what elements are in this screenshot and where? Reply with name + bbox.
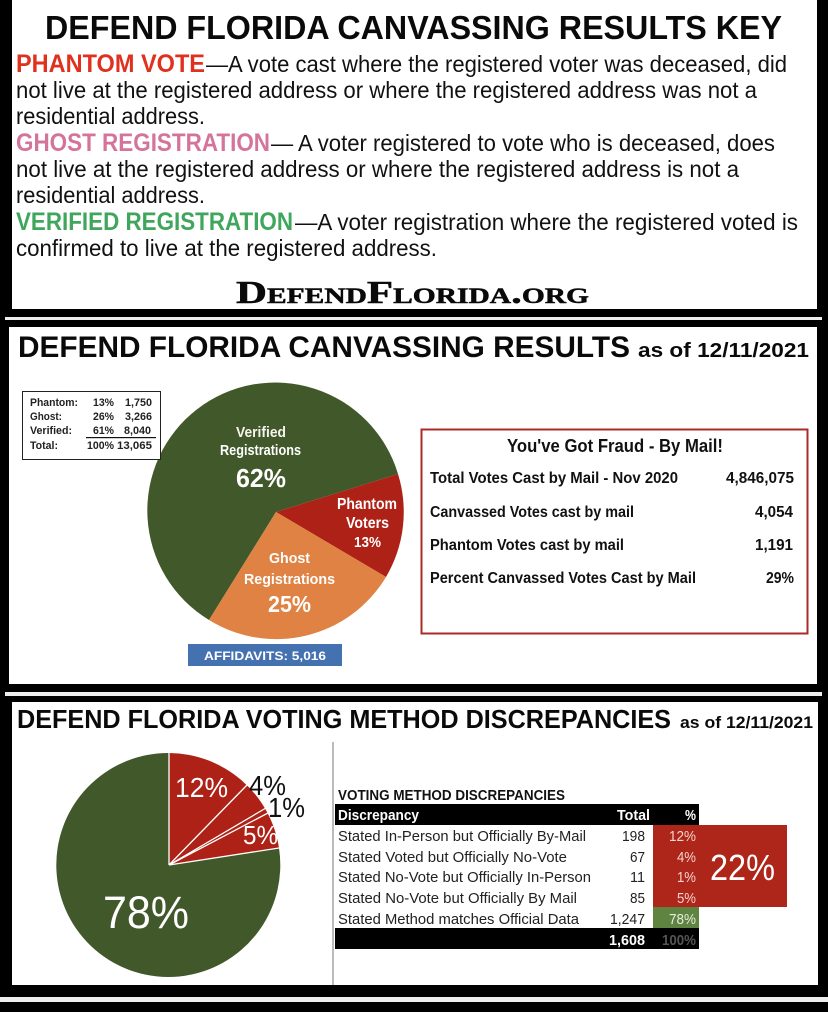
label: phantom voters: Phantom (337, 496, 397, 513)
text block: verified registration definition (16, 208, 798, 261)
text block: phantom vote definition: residential address. (16, 103, 205, 129)
callout: fraud by mail: 4,846,075 (726, 470, 794, 487)
heading: canvassing results: as of 12/11/2021 (638, 340, 809, 362)
table: voting method discrepancies: 100% (662, 932, 696, 949)
summary table: 61% (93, 425, 114, 437)
callout: fraud by mail: Phantom Votes cast by mail (430, 537, 624, 554)
summary table: Verified: (30, 425, 72, 437)
text block: phantom vote definition: not live at the registered address or where the registered address was not a (16, 77, 757, 103)
label: ghost registrations: Registrations (244, 571, 335, 588)
label: 78 percent: 78% (103, 887, 189, 938)
text block: ghost registration definition: not live at the registered address or where the registered address is not a (16, 156, 739, 182)
label: 1 percent: 1% (268, 792, 305, 823)
callout: fraud by mail: 4,054 (755, 504, 793, 521)
table: voting method discrepancies (335, 788, 787, 949)
label: verified registrations: 62% (236, 463, 286, 493)
summary table: 1,750 (125, 397, 152, 409)
text block: phantom vote definition: PHANTOM VOTE (16, 50, 205, 78)
summary table: 26% (93, 411, 114, 423)
callout: fraud by mail: 1,191 (755, 537, 793, 554)
table: voting method discrepancies: 1,608 (609, 932, 645, 949)
panel: results key (12, 0, 817, 310)
table: voting method discrepancies: Discrepancy (338, 807, 420, 824)
table: voting method discrepancies: Total (617, 807, 650, 824)
label: 4 percent: 4% (249, 770, 286, 801)
label: verified registrations (220, 425, 301, 493)
heading: voting method discrepancies: as of 12/11/2021 (680, 714, 813, 732)
summary table: Ghost: (30, 411, 62, 423)
summary table: 3,266 (125, 411, 152, 423)
text block: verified registration definition: —A voter registration where the registered voted is (295, 209, 798, 235)
summary table: Total: (30, 440, 58, 452)
pie chart: registration results (147, 383, 404, 639)
label: ghost registrations (244, 550, 335, 617)
table: voting method discrepancies: 4% (677, 850, 696, 866)
table: voting method discrepancies: 5% (677, 891, 696, 907)
label: ghost registrations: 25% (268, 591, 311, 617)
summary table (22, 392, 160, 460)
table: voting method discrepancies: 85 (630, 891, 645, 907)
callout: fraud by mail: 29% (766, 570, 794, 587)
label: phantom voters: 13% (354, 534, 381, 551)
table: voting method discrepancies: 12% (669, 829, 696, 845)
table: voting method discrepancies: VOTING METHOD DISCREPANCIES (338, 788, 565, 804)
text block: ghost registration definition: residential address. (16, 182, 205, 208)
table: voting method discrepancies: Stated No-Vote but Officially In-Person (338, 870, 591, 886)
label: 12 percent: 12% (175, 772, 228, 803)
text block: verified registration definition: confirmed to live at the registered address. (16, 235, 437, 261)
table: voting method discrepancies: 78% (669, 912, 696, 928)
summary table: Phantom: (30, 397, 78, 409)
pie chart: discrepancy share (56, 753, 305, 977)
table: voting method discrepancies: Stated Voted but Officially No-Vote (338, 850, 567, 866)
table: voting method discrepancies: 67 (630, 850, 645, 866)
text block: ghost registration definition (16, 129, 775, 208)
table: voting method discrepancies: % (685, 807, 696, 824)
text block: ghost registration definition: — A voter registered to vote who is deceased, does (271, 130, 775, 156)
callout: fraud by mail: Canvassed Votes cast by mail (430, 504, 634, 521)
summary table: 100% (87, 440, 114, 452)
badge: affidavits (188, 644, 342, 666)
panel: canvassing results (9, 327, 817, 684)
heading: voting method discrepancies: DEFEND FLORIDA VOTING METHOD DISCREPANCIES (17, 704, 671, 734)
table: voting method discrepancies: 1% (677, 870, 696, 886)
label: phantom voters: Voters (346, 515, 389, 532)
callout: fraud by mail: Total Votes Cast by Mail - Nov 2020 (430, 470, 678, 487)
text block: ghost registration definition: GHOST REGISTRATION (16, 129, 270, 157)
label: verified registrations: Registrations (220, 443, 301, 459)
title: canvassing results key: DEFEND FLORIDA CANVASSING RESULTS KEY (45, 9, 782, 46)
panel: voting method discrepancies (12, 702, 818, 985)
table: voting method discrepancies: 11 (630, 870, 645, 886)
text block: phantom vote definition (16, 50, 787, 129)
label: phantom voters (337, 496, 397, 551)
heading: canvassing results: DEFEND FLORIDA CANVASSING RESULTS (18, 331, 630, 364)
callout: fraud by mail: You've Got Fraud - By Mail! (507, 436, 723, 456)
callout: fraud by mail (422, 430, 808, 634)
label: 5 percent: 5% (243, 820, 278, 850)
table: voting method discrepancies: Stated No-Vote but Officially By Mail (338, 891, 577, 907)
table: voting method discrepancies: 198 (622, 829, 645, 845)
text block: verified registration definition: VERIFIED REGISTRATION (16, 208, 293, 236)
label: verified registrations: Verified (236, 425, 286, 441)
callout: 22 percent total: 22% (710, 847, 775, 888)
text block: phantom vote definition: —A vote cast where the registered voter was deceased, did (206, 51, 787, 77)
website name: DefendFlorida.org (236, 274, 589, 310)
callout: fraud by mail: Percent Canvassed Votes Cast by Mail (430, 570, 696, 587)
table: voting method discrepancies: Stated Method matches Official Data (338, 912, 580, 928)
summary table: 13% (93, 397, 114, 409)
summary table: 8,040 (124, 425, 151, 437)
table: voting method discrepancies: 1,247 (610, 912, 645, 928)
label: ghost registrations: Ghost (269, 550, 310, 567)
summary table: 13,065 (117, 440, 152, 452)
badge: affidavits: AFFIDAVITS: 5,016 (204, 649, 326, 663)
table: voting method discrepancies: Stated In-Person but Officially By-Mail (338, 829, 586, 845)
